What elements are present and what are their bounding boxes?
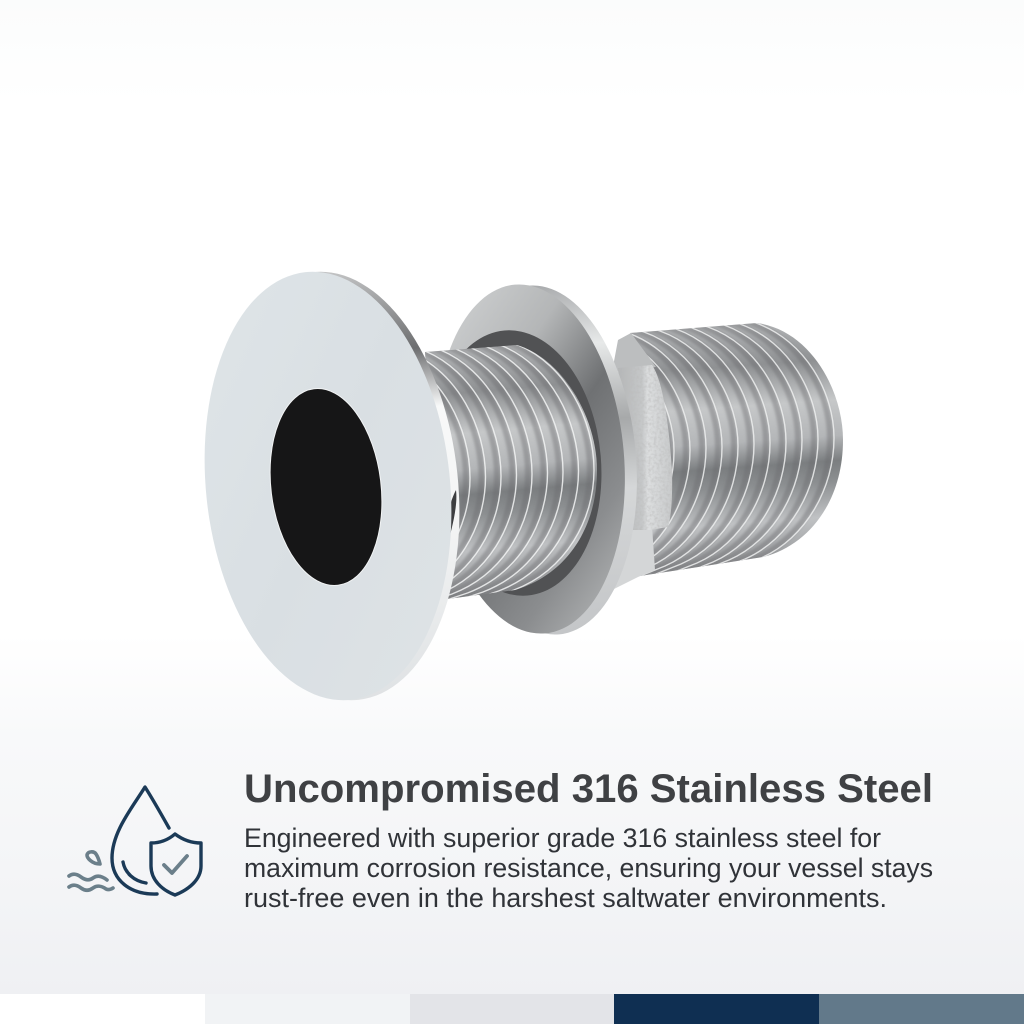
check mark [164, 856, 187, 873]
description text: maximum corrosion resistance, ensuring your vessel stays [244, 853, 933, 883]
description text [244, 823, 933, 913]
upper shoulder behind washer [612, 333, 656, 372]
flange reflection sliver [445, 490, 456, 548]
drop outline [112, 787, 169, 894]
flange [184, 259, 480, 713]
splash droplet [87, 852, 100, 864]
shield [151, 834, 201, 895]
flange bore [259, 382, 393, 592]
description text: Engineered with superior grade 316 stainless steel for [244, 823, 881, 853]
description text: rust-free even in the harshest saltwater environments. [244, 883, 887, 913]
hex nut [618, 365, 672, 530]
lower shoulder behind washer [612, 525, 655, 590]
washer [420, 276, 651, 642]
heading: Uncompromised 316 Stainless Steel [244, 767, 933, 811]
waves [69, 874, 113, 890]
product: stainless steel thru-hull fitting [184, 259, 843, 713]
icon: water drop with shield [69, 787, 201, 895]
drop inner arc [123, 862, 146, 883]
colour palette strip [0, 994, 1024, 1024]
front threaded section [425, 345, 597, 599]
rear threaded section [630, 323, 843, 576]
